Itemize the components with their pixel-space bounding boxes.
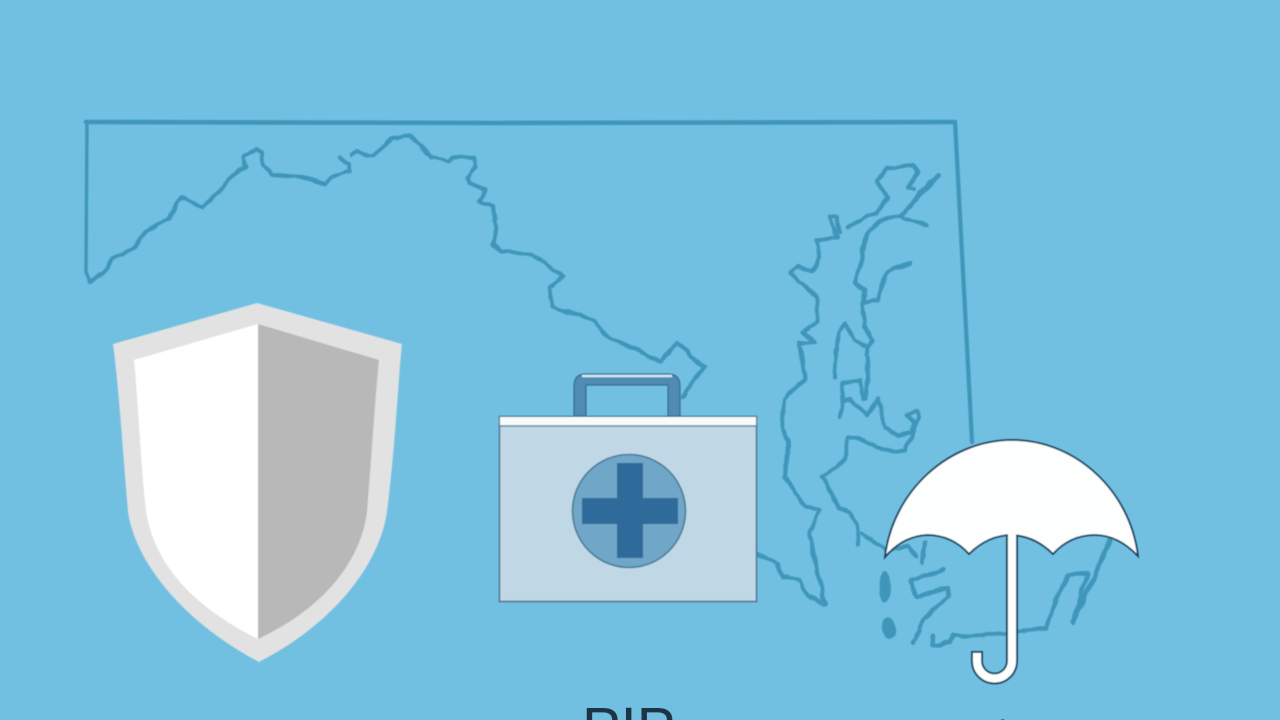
map coastline and river lines (90, 136, 1110, 646)
umbrella stem and hook (972, 536, 1017, 684)
map border lines (86, 122, 972, 442)
medical cross (582, 463, 678, 558)
briefcase lid (500, 417, 756, 425)
shield rim (113, 303, 402, 662)
umbrella canopy (885, 440, 1138, 557)
briefcase handle (574, 374, 680, 416)
map: state outline of Maryland (86, 122, 1110, 646)
icon: medical briefcase (500, 374, 756, 602)
shield dark half (258, 324, 379, 639)
icon: umbrella (885, 440, 1138, 684)
medical badge (572, 454, 686, 568)
briefcase body (500, 416, 756, 602)
shield light half (134, 324, 258, 639)
icon: shield (113, 303, 402, 662)
